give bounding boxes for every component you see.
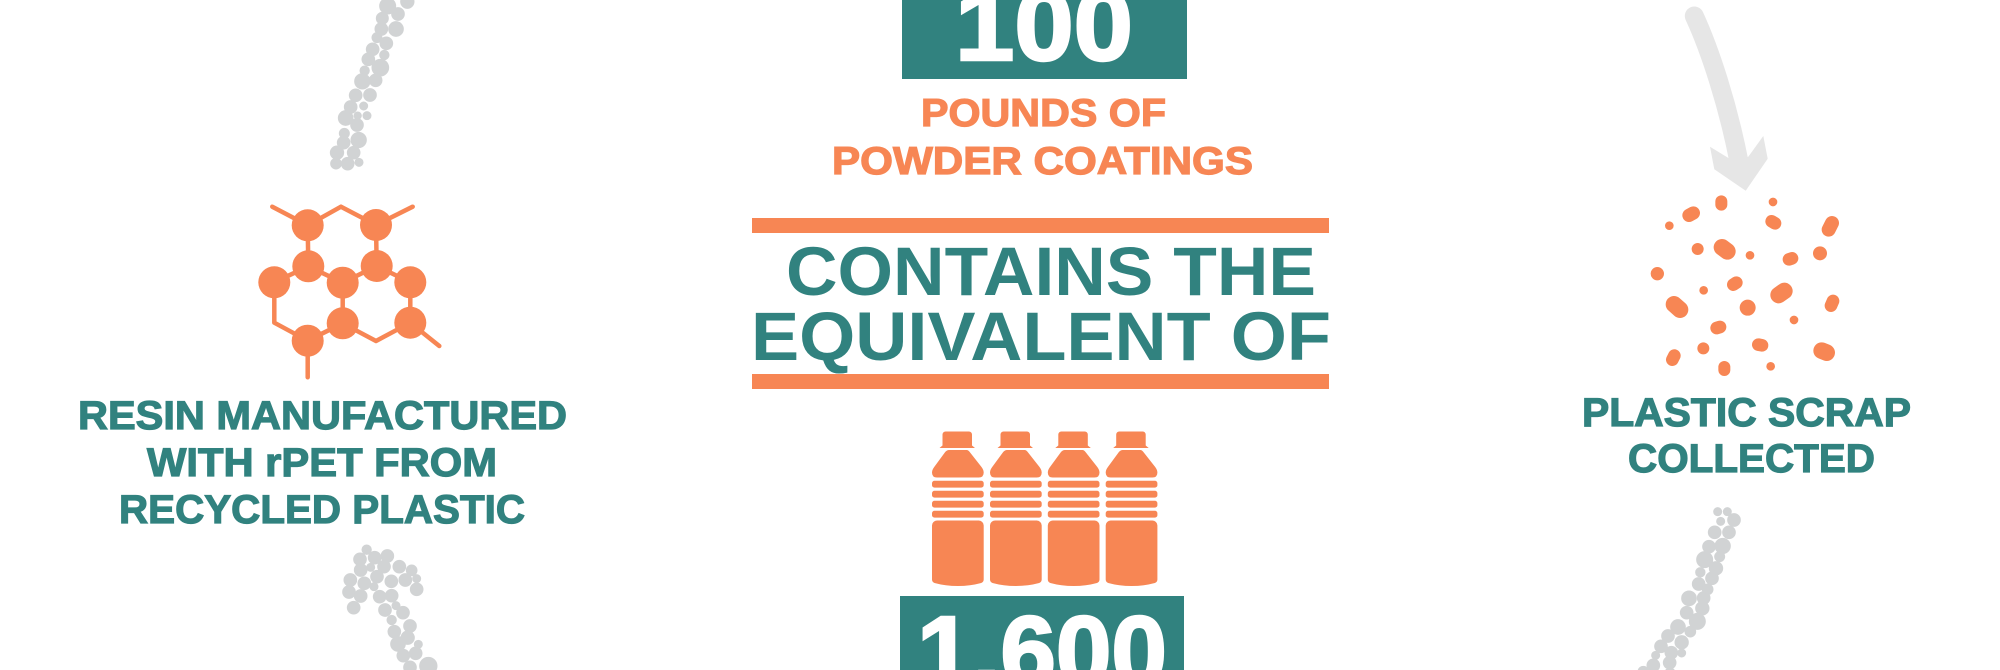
- text: pounds of powder coatings: POUNDS OF: [921, 92, 1166, 135]
- text: pounds of powder coatings: [832, 92, 1253, 183]
- top number box: 100: [902, 0, 1187, 82]
- arrow: curved grey: [1694, 16, 1768, 191]
- dotted path: top left: [331, 0, 414, 170]
- text: resin manufactured with rPET: [78, 394, 567, 532]
- text: resin manufactured with rPET: RECYCLED PLASTIC: [119, 488, 525, 532]
- heading: contains the equivalent of: CONTAINS THE: [786, 233, 1316, 310]
- icon: resin molecule: [258, 207, 439, 377]
- text: resin manufactured with rPET: WITH rPET FROM: [147, 441, 497, 485]
- icon: plastic scrap pieces: [1651, 198, 1833, 370]
- dotted path: bottom left: [343, 545, 437, 670]
- icon: four plastic bottles: [932, 432, 1157, 586]
- text: plastic scrap collected: PLASTIC SCRAP: [1582, 391, 1911, 435]
- text: plastic scrap collected: [1582, 391, 1911, 481]
- heading: contains the equivalent of: [751, 233, 1331, 375]
- dotted path: bottom right: [1638, 508, 1740, 670]
- text: pounds of powder coatings: POWDER COATINGS: [832, 140, 1253, 183]
- divider bar: top: [752, 218, 1329, 233]
- text: resin manufactured with rPET: RESIN MANUFACTURED: [78, 394, 567, 438]
- text: plastic scrap collected: COLLECTED: [1628, 437, 1875, 481]
- heading: contains the equivalent of: EQUIVALENT OF: [751, 298, 1331, 375]
- divider bar: bottom: [752, 374, 1329, 389]
